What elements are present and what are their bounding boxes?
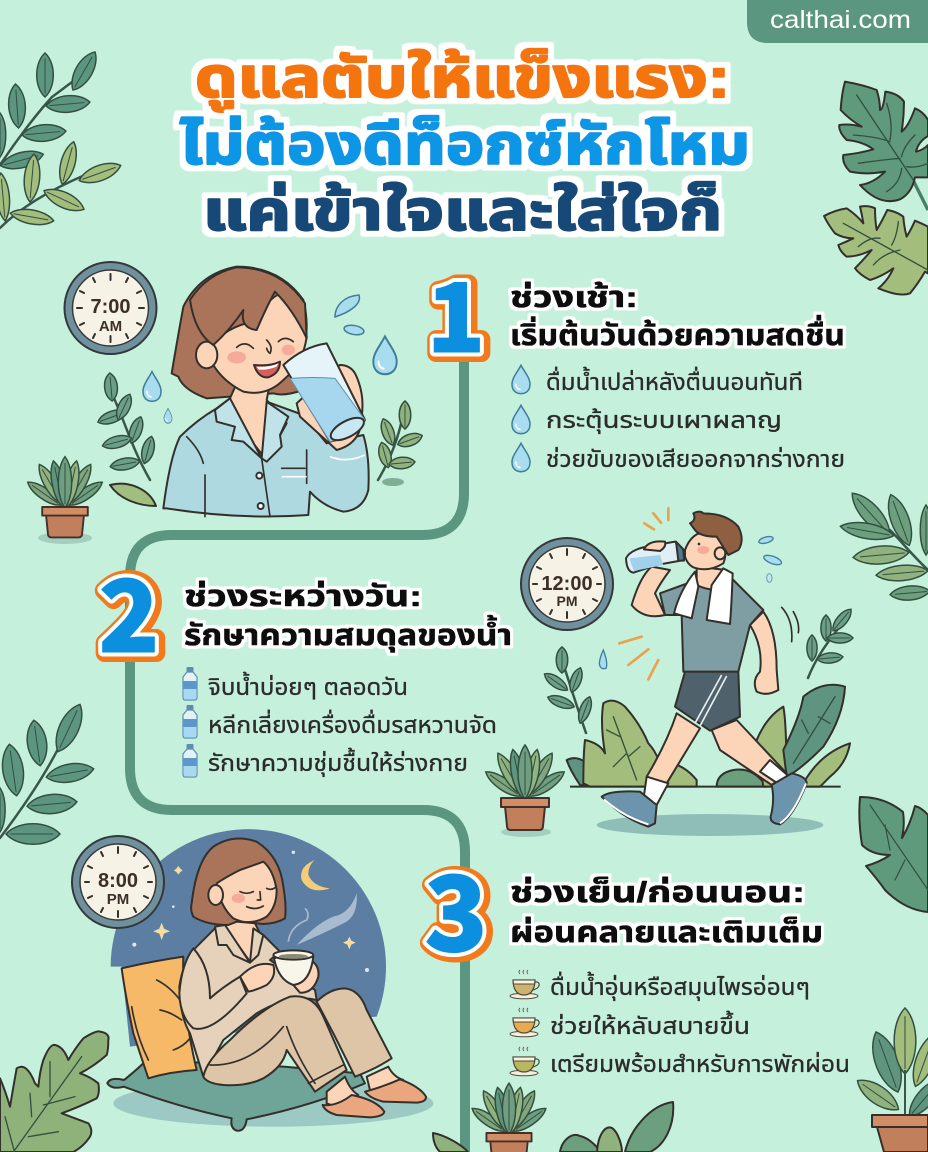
clock: 7:00 AM: AM	[99, 318, 122, 335]
illustration: right herb sprig beside woman drinking	[376, 401, 424, 486]
face	[209, 295, 307, 393]
water bottle	[626, 542, 684, 573]
step 2 heading: รักษาความสมดุลของน้ำ	[184, 614, 512, 652]
step 2 bullet list	[183, 667, 497, 777]
decoration: top-right monstera leaf	[839, 82, 928, 210]
step 2 heading	[184, 581, 512, 652]
hair back	[172, 267, 307, 398]
step 1 heading: เริ่มต้นวันด้วยความสดชื่น	[510, 314, 845, 352]
title: ดูแลตับให้แข็งแรง:	[195, 46, 730, 112]
step 2 bullet list: จิบน้ำบ่อยๆ ตลอดวัน	[208, 671, 408, 700]
step 1 bullet list: กระตุ้นระบบเผาผลาญ	[546, 407, 782, 434]
towel	[674, 572, 698, 618]
decoration: bottom-left oak leaf	[0, 1031, 109, 1152]
neck and head	[697, 567, 730, 590]
clock: 8:00 PM	[72, 836, 164, 928]
decoration: top-left light branch	[0, 140, 123, 228]
hair	[191, 838, 286, 925]
decoration: top-left dark branch	[0, 48, 102, 173]
step 2 number: 2	[99, 536, 159, 681]
step 3 bullet list: ช่วยให้หลับสบายขึ้น	[550, 1010, 750, 1039]
illustration: woman drinking a glass of water	[163, 267, 369, 517]
decoration: right lower monstera leaf	[859, 797, 928, 912]
shorts	[675, 672, 740, 731]
step 2 bullet list: รักษาความชุ่มชื้นให้ร่างกาย	[208, 747, 468, 777]
pyjama top	[163, 398, 369, 516]
shadow	[113, 1080, 433, 1127]
glass of water	[283, 343, 365, 442]
bangs	[190, 267, 307, 345]
step 1 bullet list: ช่วยขับของเสียออกจากร่างกาย	[546, 446, 845, 472]
arm	[179, 948, 247, 1029]
night sky backdrop, moon, stars and steam	[111, 829, 386, 1047]
back shoe	[771, 773, 807, 824]
step 1 heading	[510, 282, 845, 352]
timeline path connecting the three steps	[130, 355, 465, 1152]
illustration: woman relaxing on a cushion with a warm drink	[107, 838, 433, 1131]
far leg	[317, 988, 392, 1077]
front leg	[647, 713, 700, 783]
decoration: bottom-centre leaves	[433, 1102, 673, 1152]
illustration: man walking and drinking from a bottle	[602, 512, 807, 827]
neck and collar	[223, 920, 260, 962]
step 1 heading: ช่วงเช้า:	[510, 282, 638, 314]
illustration: potted plant bottom centre	[469, 1083, 549, 1152]
clock: 8:00 PM: PM	[107, 891, 129, 908]
step 3 heading	[510, 877, 823, 949]
illustration: walking scene foliage	[567, 685, 850, 836]
title: ไม่ต้องดีท็อกซ์หักโหม	[180, 113, 750, 176]
step 3 number: 3	[424, 830, 488, 981]
clock: 7:00 AM	[64, 262, 156, 354]
open mouth	[254, 362, 280, 377]
clock: 8:00 PM: 8:00	[98, 870, 138, 892]
clock: 12:00 PM	[521, 538, 613, 630]
hand behind glass	[297, 365, 362, 450]
neck	[230, 383, 287, 460]
step 1 number: 1	[427, 241, 485, 380]
illustration: small sprigs in walking scene	[542, 606, 855, 733]
cup	[274, 955, 313, 985]
step 2 number: 2	[101, 537, 161, 682]
illustration: potted plant centre	[483, 745, 567, 837]
decoration: left middle branch	[0, 700, 95, 844]
motion marks and sweat droplets	[599, 508, 799, 679]
step 3 heading: ช่วงเย็น/ก่อนนอน:	[510, 877, 805, 909]
t-shirt	[660, 580, 763, 672]
collars	[215, 398, 262, 458]
clock: 12:00 PM: PM	[556, 593, 578, 609]
illustration: potted plant left	[25, 457, 105, 544]
step 2 bullet list: หลีกเลี่ยงเครื่องดื่มรสหวานจัด	[208, 709, 497, 738]
decoration: right light monstera leaf	[824, 206, 928, 295]
front shoe	[602, 791, 657, 827]
clock: 7:00 AM: 7:00	[90, 296, 131, 318]
near leg and hip	[203, 996, 347, 1092]
back pillow	[122, 957, 197, 1078]
step 3 heading: ผ่อนคลายและเติมเต็ม	[510, 917, 823, 949]
pyjama torso	[179, 927, 317, 1077]
brand tag: calthai.com	[770, 6, 911, 34]
decoration: right upper branch	[839, 487, 928, 602]
step 3 bullet list: ดื่มน้ำอุ่นหรือสมุนไพรอ่อนๆ	[550, 971, 810, 1001]
near foot and slipper	[327, 1077, 358, 1110]
step 2 heading: ช่วงระหว่างวัน:	[184, 581, 422, 613]
raised arm	[632, 567, 670, 616]
title: แค่เข้าใจและใส่ใจก็	[203, 179, 722, 242]
illustration: potted plant bottom right	[852, 1008, 928, 1152]
face	[217, 862, 277, 922]
step 3 number: 3	[426, 831, 490, 982]
step 1 number: 1	[427, 241, 485, 380]
step 2 number: 2	[99, 536, 159, 681]
step 3 number: 3	[424, 830, 488, 981]
step 1 number: 1	[429, 242, 487, 381]
title	[180, 46, 750, 242]
hands	[240, 964, 274, 992]
step 3 bullet list	[510, 970, 850, 1077]
clock: 12:00 PM: 12:00	[541, 573, 593, 595]
rear arm	[750, 612, 778, 694]
step 1 bullet list	[512, 365, 845, 472]
illustration: left herb sprig beside woman drinking	[96, 372, 157, 506]
back leg	[712, 720, 787, 785]
water droplets around woman	[143, 295, 397, 423]
step 1 bullet list: ดื่มน้ำเปล่าหลังตื่นนอนทันที	[546, 366, 803, 395]
floor cushion	[107, 1060, 365, 1131]
brand tag	[747, 0, 928, 43]
step 3 bullet list: เตรียมพร้อมสำหรับการพักผ่อน	[550, 1051, 850, 1077]
